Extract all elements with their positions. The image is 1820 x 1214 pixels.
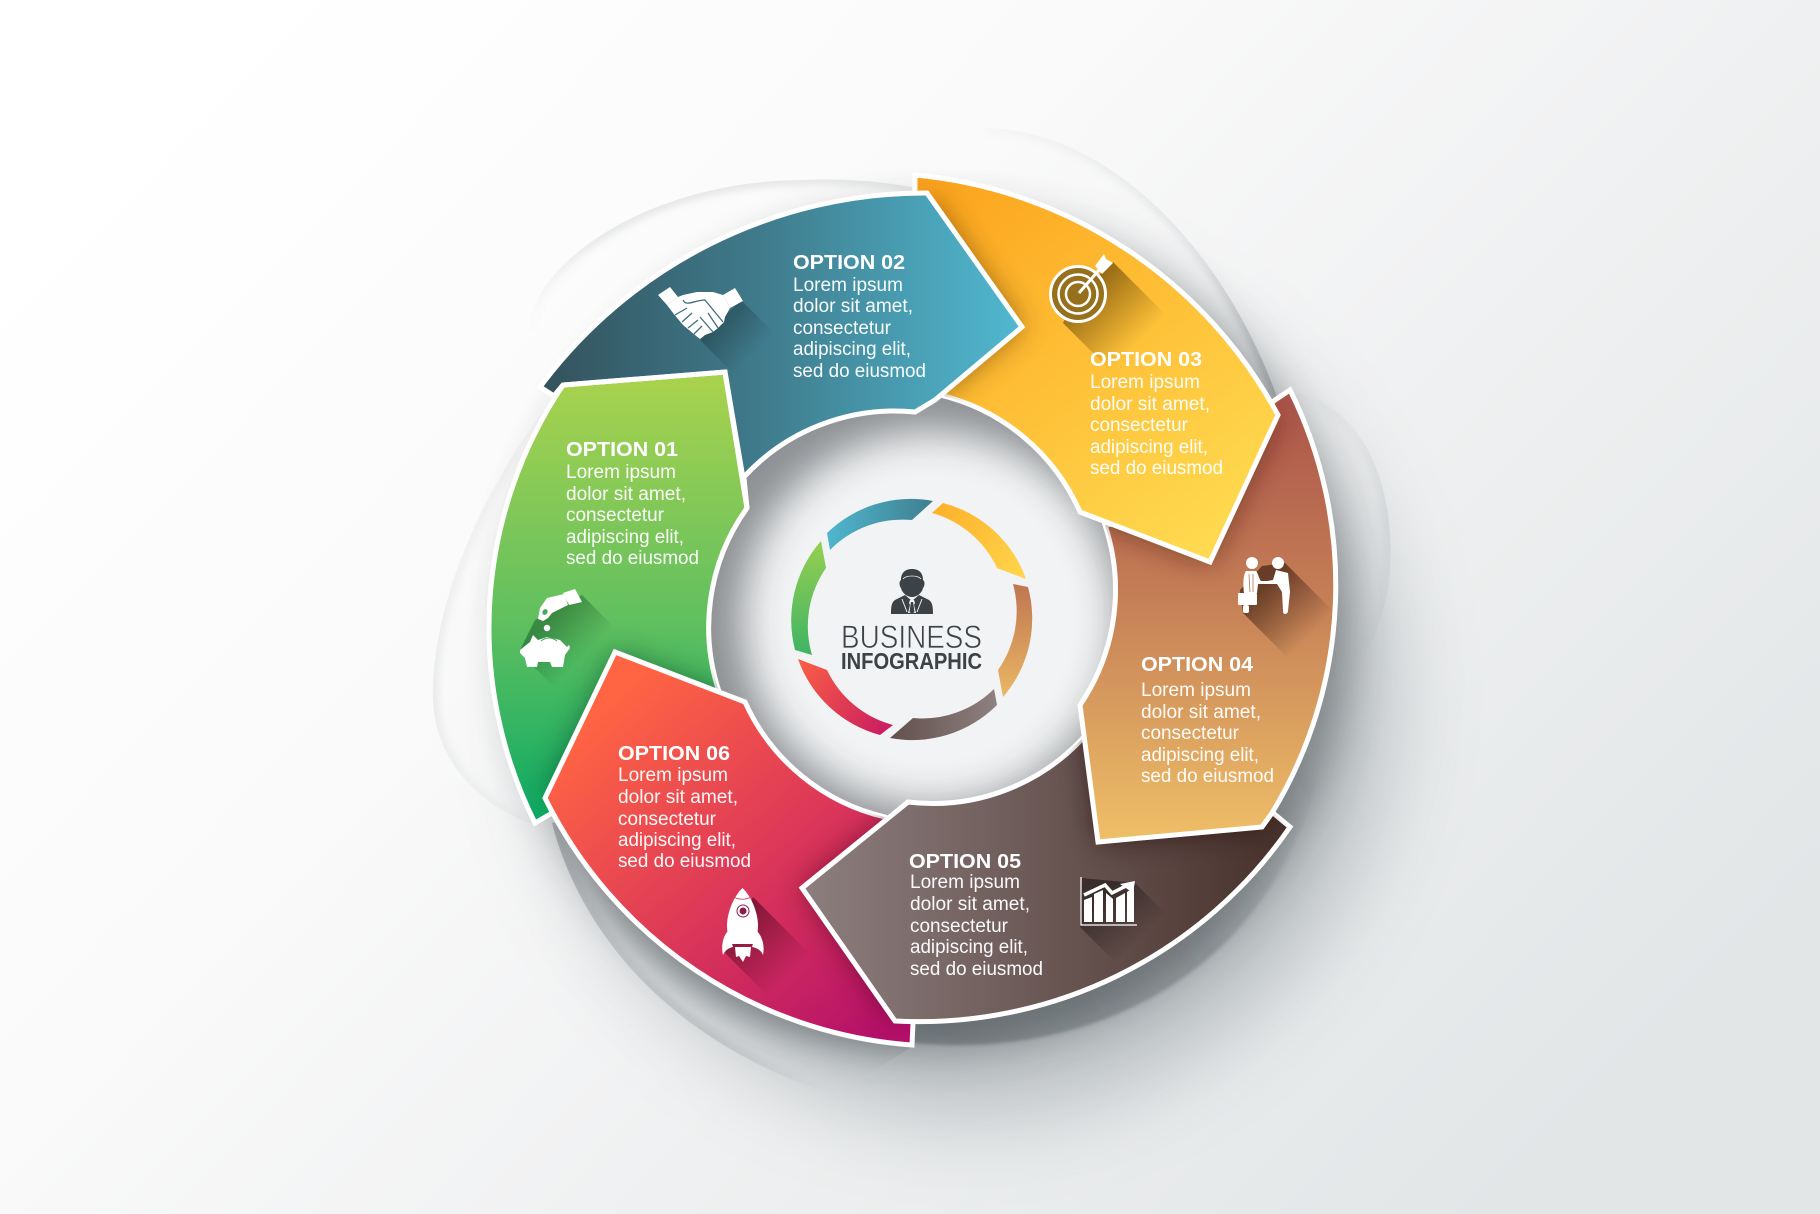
panel: option 05 brown segment: [802, 730, 1290, 1022]
text: option 06: Lorem ipsum: [618, 765, 728, 786]
text: option 01: adipiscing elit,: [566, 527, 684, 548]
icon: option 02 long shadow: [700, 300, 841, 440]
panel: option 06 red segment: [545, 652, 913, 1045]
text: option 03: consectetur: [1090, 415, 1189, 436]
text: option 06: [618, 742, 751, 872]
text: option 02: consectetur: [793, 318, 892, 339]
icon: bar chart with arrow: [1081, 877, 1137, 925]
title: business infographic: BUSINESS: [841, 619, 982, 655]
icon: option 05 long shadow: [1080, 878, 1235, 1027]
text: option 01: [566, 438, 699, 569]
text: option 04: Lorem ipsum: [1141, 680, 1251, 701]
text: option 03: sed do eiusmod: [1090, 458, 1223, 479]
icon: option 01 long shadow: [520, 595, 682, 763]
ring ground shadow: [512, 212, 1390, 1115]
shadow: tan arrow on brown: [1080, 705, 1272, 842]
text: option 03: Lorem ipsum: [1090, 372, 1200, 393]
paper blades behind the ring: [433, 128, 1391, 1095]
panel: option 02 teal segment: [540, 193, 1022, 478]
text: option 05: Lorem ipsum: [910, 872, 1020, 893]
icon: rocket: [722, 888, 764, 962]
icon: handshake: [658, 287, 743, 339]
icon: target with dart: [1050, 254, 1113, 322]
text: option 01: dolor sit amet,: [566, 484, 686, 505]
text: option 06: dolor sit amet,: [618, 787, 738, 808]
text: option 02: Lorem ipsum: [793, 275, 903, 296]
icon: option 03 long shadow: [1063, 262, 1213, 423]
text: option 01: consectetur: [566, 505, 665, 526]
text: option 02: OPTION 02: [793, 251, 905, 274]
text: option 01: sed do eiusmod: [566, 548, 699, 569]
title: business infographic: INFOGRAPHIC: [841, 648, 982, 674]
text: option 02: dolor sit amet,: [793, 296, 913, 317]
text: option 05: adipiscing elit,: [910, 937, 1028, 958]
text: option 05: dolor sit amet,: [910, 894, 1030, 915]
text: option 03: adipiscing elit,: [1090, 437, 1208, 458]
icon: option 04 long shadow: [1240, 563, 1385, 713]
text: option 02: [793, 251, 926, 382]
text: option 06: sed do eiusmod: [618, 851, 751, 872]
text: option 04: consectetur: [1141, 723, 1240, 744]
icon: option 06 long shadow: [725, 897, 853, 1053]
shadow: teal arrow on yellow: [915, 186, 1034, 402]
text: option 06: consectetur: [618, 809, 717, 830]
text: option 01: Lorem ipsum: [566, 462, 676, 483]
text: option 02: adipiscing elit,: [793, 339, 911, 360]
text: option 05: OPTION 05: [909, 850, 1021, 873]
text: option 06: adipiscing elit,: [618, 830, 736, 851]
text: option 04: dolor sit amet,: [1141, 702, 1261, 723]
icon: hand dropping coin into piggy bank: [520, 589, 582, 667]
text: option 04: [1141, 653, 1274, 787]
text: option 05: [909, 850, 1043, 980]
text: option 05: sed do eiusmod: [910, 959, 1043, 980]
option 01 top edge over teal: [554, 372, 747, 508]
text: option 04: sed do eiusmod: [1141, 766, 1274, 787]
icon: businessman: [891, 569, 933, 614]
text: option 02: sed do eiusmod: [793, 361, 926, 382]
icon: two people shaking hands: [1238, 557, 1290, 614]
inner disc: [711, 398, 1113, 816]
shadow: brown arrow on red: [792, 812, 912, 1026]
text: option 03: dolor sit amet,: [1090, 394, 1210, 415]
text: option 04: OPTION 04: [1141, 653, 1254, 676]
shadow: yellow arrow on tan: [1080, 415, 1278, 562]
panel: option 04 tan segment: [1080, 390, 1336, 842]
title: business infographic: [841, 619, 982, 674]
text: option 01: OPTION 01: [566, 438, 678, 461]
shadow: red arrow on green: [545, 652, 745, 800]
mini ring chart: [791, 499, 1032, 740]
text: option 06: OPTION 06: [618, 742, 730, 765]
text: option 05: consectetur: [910, 916, 1009, 937]
text: option 03: [1090, 348, 1223, 479]
text: option 03: OPTION 03: [1090, 348, 1202, 371]
panel: option 03 yellow segment: [915, 175, 1278, 562]
panel: option 01 green segment base: [489, 372, 747, 823]
text: option 04: adipiscing elit,: [1141, 745, 1259, 766]
